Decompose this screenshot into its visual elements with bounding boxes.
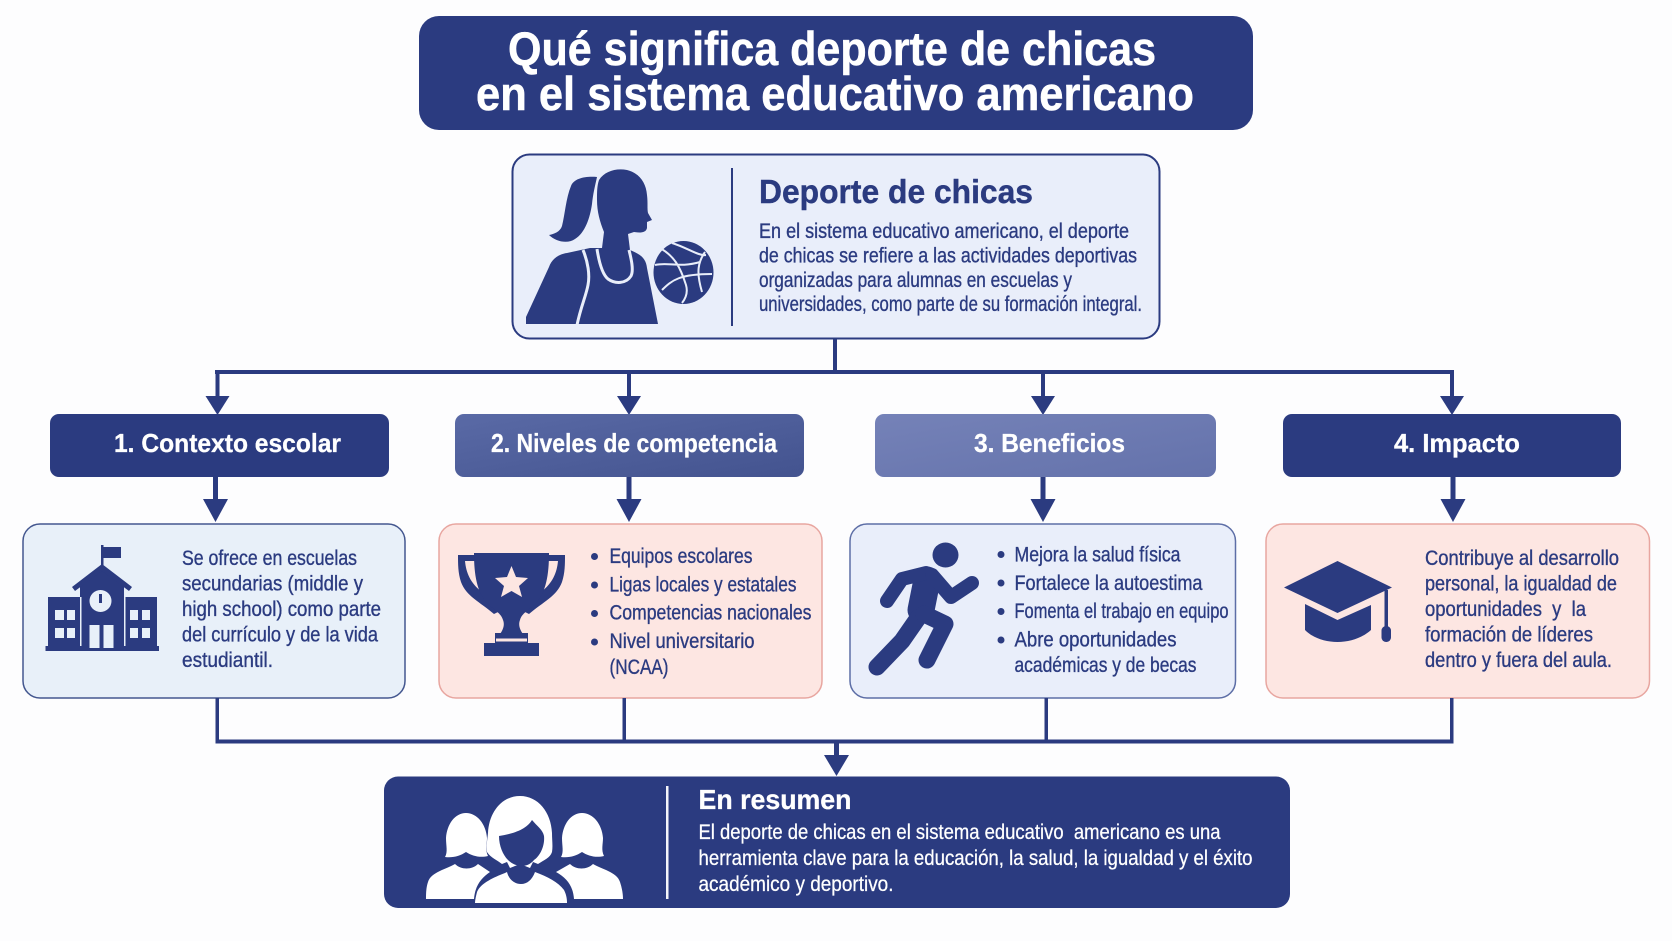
arrows: headers to cards [203, 477, 1466, 522]
description: organizadas para alumnas en escuelas y [759, 269, 1072, 292]
icon: school [46, 545, 159, 651]
header: 1. Contexto escolar: 1. Contexto escolar [114, 428, 341, 458]
list: Fomenta el trabajo en equipo [1014, 600, 1228, 623]
arrows: top connector to categories [206, 339, 1464, 415]
text: estudiantil. [182, 649, 273, 672]
summary text: académico y deportivo. [698, 873, 894, 896]
text: Se ofrece en escuelas [182, 547, 357, 570]
text: personal, la igualdad de [1425, 572, 1617, 596]
panel: en resumen [384, 776, 1290, 908]
text: dentro y fuera del aula. [1425, 649, 1612, 672]
divider [731, 168, 733, 326]
icon: trophy [458, 553, 565, 656]
summary text: herramienta clave para la educación, la salud, la igualdad y el éxito [698, 847, 1252, 870]
panel: deporte de chicas [512, 154, 1160, 338]
list: académicas y de becas [1014, 654, 1196, 677]
list [998, 544, 1228, 677]
title: en el sistema educativo americano [476, 67, 1194, 120]
title [419, 16, 1253, 130]
heading: En resumen [698, 784, 852, 815]
header: 1. Contexto escolar [50, 414, 389, 477]
divider [666, 786, 668, 899]
icon: group of girls [426, 796, 623, 903]
list: (NCAA) [610, 656, 668, 679]
list: Nivel universitario [610, 630, 754, 653]
header: 4. Impacto [1283, 414, 1621, 477]
text: Contribuye al desarrollo [1425, 547, 1619, 570]
list [591, 545, 812, 679]
text: formación de líderes [1425, 624, 1593, 646]
description: de chicas se refiere a las actividades deportivas [759, 244, 1137, 268]
summary text [698, 821, 1252, 896]
description: universidades, como parte de su formación integral. [759, 293, 1142, 316]
text: del currículo y de la vida [182, 624, 378, 646]
icon: graduation cap [1284, 561, 1392, 642]
summary text: El deporte de chicas en el sistema educativo americano es una [698, 821, 1221, 844]
header: 2. Niveles de competencia [455, 414, 804, 477]
description [759, 220, 1142, 316]
text: secundarias (middle y [182, 572, 363, 596]
panel: contexto escolar [23, 524, 405, 698]
header: 3. Beneficios: 3. Beneficios [974, 428, 1125, 458]
list: Competencias nacionales [610, 602, 812, 624]
header: 2. Niveles de competencia: 2. Niveles de competencia [491, 428, 777, 458]
list: Fortalece la autoestima [1014, 572, 1203, 595]
title: Qué significa deporte de chicas [508, 22, 1156, 75]
heading: Deporte de chicas [759, 173, 1033, 210]
header: 4. Impacto: 4. Impacto [1394, 428, 1520, 458]
text: oportunidades y la [1425, 598, 1586, 621]
description: En el sistema educativo americano, el deporte [759, 220, 1129, 243]
list: Ligas locales y estatales [610, 574, 796, 596]
text: high school) como parte [182, 598, 381, 621]
text [1425, 547, 1619, 672]
panel: beneficios [850, 524, 1236, 698]
list: Equipos escolares [610, 545, 752, 568]
icon: runner [877, 542, 972, 667]
list: Mejora la salud física [1014, 544, 1181, 566]
list: Abre oportunidades [1014, 628, 1176, 652]
header: 3. Beneficios [875, 414, 1216, 477]
panel: impacto [1266, 524, 1650, 698]
arrows: cards to summary [216, 698, 1454, 776]
icon: girl with basketball [526, 169, 714, 325]
text [182, 547, 381, 672]
panel: niveles de competencia [439, 524, 822, 698]
